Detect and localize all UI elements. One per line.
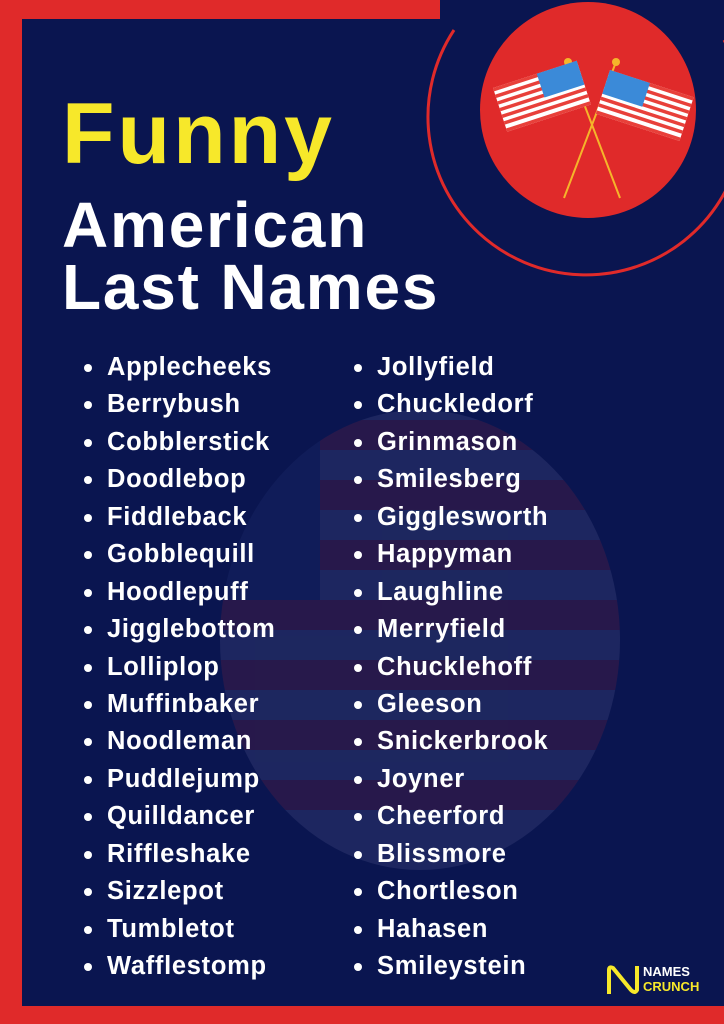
logo: NAMES	[643, 964, 690, 979]
subtitle: Last Names	[62, 251, 439, 323]
list column 1: Puddlejump	[107, 765, 260, 793]
list column 2: Gleeson	[377, 690, 483, 718]
list column 2: Grinmason	[377, 428, 518, 456]
list column 2: Happyman	[377, 540, 513, 568]
list column 1: Riffleshake	[107, 840, 251, 868]
list column 1: Gobblequill	[107, 540, 255, 568]
list column 2: Chortleson	[377, 877, 519, 905]
subtitle	[62, 189, 439, 323]
list column 2: Jollyfield	[377, 353, 495, 381]
list column 2	[354, 353, 548, 980]
list column 2: Chuckledorf	[377, 390, 533, 418]
list column 1: Noodleman	[107, 727, 252, 755]
list column 2: Blissmore	[377, 840, 507, 868]
logo	[607, 964, 699, 994]
list column 1: Lolliplop	[107, 652, 220, 680]
list column 1	[84, 353, 275, 980]
list column 2: Cheerford	[377, 802, 505, 830]
list column 1: Applecheeks	[107, 353, 272, 381]
subtitle: American	[62, 189, 368, 261]
list column 2: Smilesberg	[377, 465, 521, 493]
list column 1: Jigglebottom	[107, 615, 275, 643]
left flag	[493, 61, 591, 132]
list column 1: Wafflestomp	[107, 952, 267, 980]
list column 1: Hoodlepuff	[107, 578, 249, 606]
logo: CRUNCH	[643, 979, 699, 994]
list column 2: Joyner	[377, 765, 465, 793]
list column 2: Merryfield	[377, 615, 506, 643]
list column 1: Muffinbaker	[107, 690, 259, 718]
list column 2: Hahasen	[377, 915, 488, 943]
list column 2: Gigglesworth	[377, 503, 548, 531]
list column 1: Quilldancer	[107, 802, 255, 830]
list column 2: Smileystein	[377, 952, 526, 980]
background flag splash	[220, 410, 620, 870]
right flag	[596, 70, 694, 141]
list column 2: Chucklehoff	[377, 652, 532, 680]
list column 1: Cobblerstick	[107, 428, 270, 456]
list column 1: Berrybush	[107, 390, 241, 418]
list column 1: Fiddleback	[107, 503, 247, 531]
list column 1: Tumbletot	[107, 915, 235, 943]
list column 1: Sizzlepot	[107, 877, 224, 905]
list column 2: Snickerbrook	[377, 727, 548, 755]
list column 2: Laughline	[377, 578, 504, 606]
list column 1: Doodlebop	[107, 465, 246, 493]
icon: flags circle	[426, 2, 724, 276]
title: Funny	[62, 86, 335, 182]
